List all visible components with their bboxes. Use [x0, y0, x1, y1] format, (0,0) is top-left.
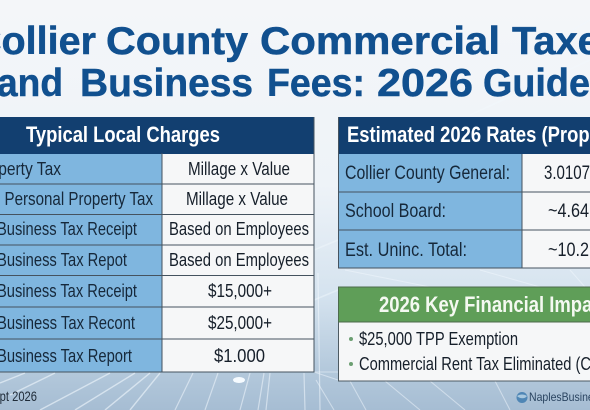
row: business tax receipt 15,000: [0, 281, 272, 301]
title: Fees:: [267, 62, 365, 105]
impacts header: [338, 287, 590, 322]
row: business tax receipt: [0, 219, 309, 239]
left table header: [0, 117, 314, 154]
impacts body: [338, 322, 590, 381]
bullet: TPP exemption: $25,000 TPP Exemption: [359, 329, 518, 349]
row: business tax repot: Based on Employees: [169, 250, 309, 270]
title: County: [106, 20, 248, 63]
background glow: [233, 377, 245, 383]
title: Commercial: [260, 20, 500, 63]
row: property tax: Millage x Value: [188, 159, 290, 179]
row: personal property tax: Millage x Value: [186, 189, 288, 209]
icon: globe: [516, 392, 528, 403]
row: business tax repot: Business Tax Repot: [0, 250, 127, 270]
row: business tax receipt: Based on Employees: [169, 219, 309, 239]
row: business tax recont: Business Tax Recont: [0, 313, 135, 333]
rates header: [338, 117, 590, 154]
row: business tax receipt 15,000: $15,000+: [208, 281, 272, 301]
row: business tax recont: $25,000+: [208, 313, 272, 333]
row: school board: [345, 201, 589, 222]
row: business tax recont: [0, 313, 272, 333]
row: personal property tax: [0, 189, 288, 209]
left table header: Typical Local Charges: [26, 122, 220, 147]
left table label and value cells: [0, 153, 314, 372]
panel: estimated 2026 rates table: [338, 117, 590, 268]
rates label and value cells: [339, 154, 590, 268]
title: 2026: [377, 62, 473, 105]
panel: 2026 key financial impacts: [338, 287, 590, 381]
row: property tax: [0, 159, 290, 179]
row: business tax receipt: Business Tax Receipt: [0, 219, 137, 239]
row: business tax report: Business Tax Report: [0, 346, 132, 366]
title: [0, 20, 590, 105]
panel: typical local charges table: [0, 117, 314, 372]
row: collier county general: Collier County General:: [345, 163, 510, 184]
row: estimated unincorporated total: Est. Uninc. Total:: [345, 240, 467, 261]
row: business tax report: $1.000: [214, 346, 265, 366]
row: business tax repot: [0, 250, 309, 270]
title: Business: [80, 62, 253, 105]
row: business tax receipt 15,000: Business Tax Receipt: [0, 281, 137, 301]
row: estimated unincorporated total: [345, 240, 589, 261]
row: school board: School Board:: [345, 201, 446, 222]
row: business tax report: [0, 346, 265, 366]
